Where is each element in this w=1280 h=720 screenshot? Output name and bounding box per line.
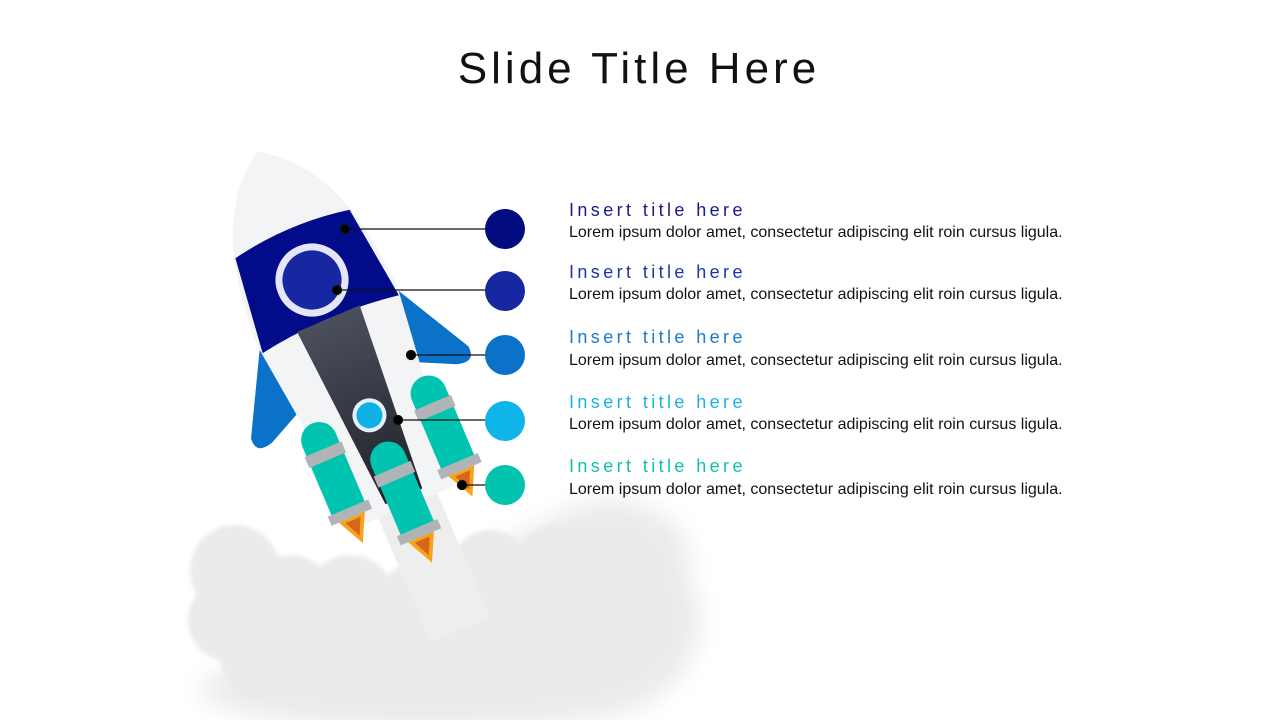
marker circles bbox=[485, 209, 525, 505]
body bbox=[187, 121, 478, 535]
item 3 bbox=[569, 327, 1063, 369]
connectors bbox=[332, 224, 490, 490]
text: Lorem ipsum dolor amet, consectetur adipiscing elit roin cursus ligula. bbox=[569, 481, 1063, 498]
clouds bbox=[188, 500, 700, 720]
item 5 bbox=[569, 456, 1063, 498]
right fin bbox=[374, 261, 474, 383]
item 2 bbox=[569, 262, 1063, 303]
title: Slide Title Here bbox=[458, 44, 820, 93]
text: Insert title here bbox=[569, 262, 746, 282]
exhaust trail bbox=[361, 452, 490, 642]
text: Insert title here bbox=[569, 456, 746, 476]
text: Lorem ipsum dolor amet, consectetur adipiscing elit roin cursus ligula. bbox=[569, 352, 1063, 369]
window bbox=[269, 237, 355, 323]
boosters bbox=[292, 368, 510, 593]
text: Insert title here bbox=[569, 200, 746, 220]
dark stripe bbox=[297, 305, 435, 510]
text: Lorem ipsum dolor amet, consectetur adipiscing elit roin cursus ligula. bbox=[569, 224, 1063, 241]
text: Insert title here bbox=[569, 392, 746, 412]
item 1 bbox=[569, 200, 1063, 241]
item 4 bbox=[569, 392, 1063, 433]
rocket bbox=[149, 105, 569, 676]
text: Insert title here bbox=[569, 327, 746, 347]
left fin bbox=[215, 329, 314, 451]
small porthole bbox=[350, 396, 389, 435]
text: Lorem ipsum dolor amet, consectetur adipiscing elit roin cursus ligula. bbox=[569, 286, 1063, 303]
blue band bbox=[222, 200, 399, 353]
text: Lorem ipsum dolor amet, consectetur adipiscing elit roin cursus ligula. bbox=[569, 416, 1063, 433]
